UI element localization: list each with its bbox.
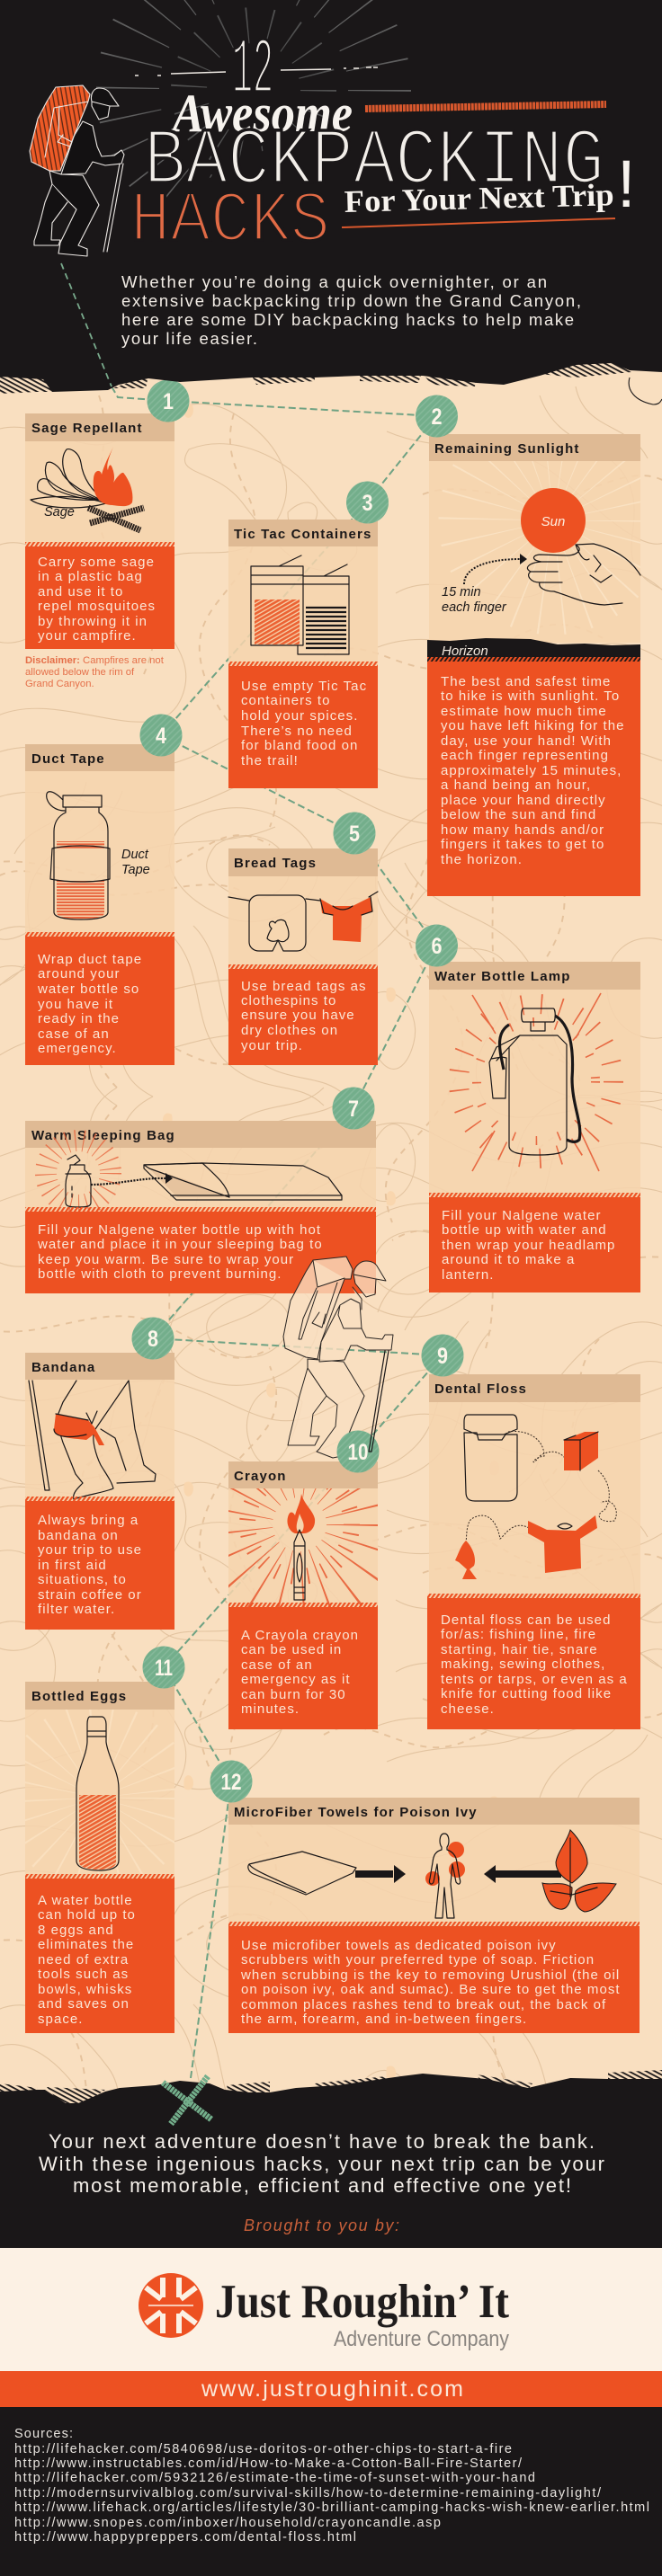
- body panel: a hand being an hour,: [441, 777, 591, 793]
- disclaimer: [25, 655, 165, 689]
- panel: MicroFiber Towels for Poison Ivy: [228, 1798, 640, 2033]
- body panel: you have left hiking for the: [441, 718, 625, 733]
- stop 10: [336, 1431, 380, 1472]
- body panel: water bottle so: [37, 982, 139, 997]
- body panel: Carry some sage: [38, 555, 155, 570]
- body panel: [25, 1497, 174, 1630]
- word BACKPACKING: BACKPACKING: [144, 118, 604, 207]
- body panel: below the sun and find: [441, 807, 596, 822]
- body panel: [427, 1594, 640, 1729]
- disclaimer: Disclaimer: Campfires are not: [25, 655, 165, 666]
- body panel: then wrap your headlamp: [442, 1238, 615, 1253]
- body panel: scrubbers with your preferred type of soap. Friction: [241, 1952, 595, 1968]
- header: dark torn-paper background: [0, 0, 662, 394]
- body panel: The best and safest time: [441, 674, 611, 689]
- stop 2: 2: [432, 404, 443, 430]
- body panel: the trail!: [241, 753, 299, 768]
- stop 7: 7: [348, 1097, 359, 1122]
- stop 6: 6: [432, 934, 443, 959]
- intro text: Whether you’re doing a quick overnighter, or an: [121, 272, 547, 291]
- icon: sun above hand: each finger: [442, 600, 507, 615]
- body panel: Fill your Nalgene water: [442, 1208, 602, 1223]
- body panel: the horizon.: [441, 852, 523, 867]
- body panel: bottle up with water and: [442, 1222, 607, 1238]
- body panel: bowls, whisks: [38, 1982, 132, 1997]
- icon: two tic tac containers: [251, 555, 349, 654]
- closing statement: most memorable, efficient and effective one yet!: [73, 2174, 571, 2197]
- stop 10: 10: [347, 1440, 369, 1465]
- body panel: starting, hair tie, snare: [441, 1642, 598, 1657]
- stop 8: 8: [148, 1327, 158, 1352]
- heading: Bandana: Bandana: [31, 1360, 95, 1375]
- panel: Sage Repellant: [25, 413, 174, 689]
- icon: towel, person, poison ivy: [248, 1830, 616, 1918]
- heading: MicroFiber Towels: MicroFiber Towels for Poison Ivy: [234, 1805, 478, 1820]
- intro text: your life easier.: [121, 329, 257, 348]
- heading: Dental Floss: Dental Floss: [434, 1381, 527, 1397]
- intro text: here are some DIY backpacking hacks to help make: [121, 310, 574, 329]
- stop 9: [421, 1334, 464, 1377]
- sources: http://www.lifehack.org/articles/lifestyle/30-brilliant-camping-hacks-wish-knew-earlier.html: [14, 2500, 649, 2515]
- body panel: [25, 932, 174, 1065]
- sources: [14, 2427, 649, 2545]
- body panel: repel mosquitoes: [38, 599, 156, 614]
- scribble underline: [365, 104, 606, 109]
- footer: dark torn-paper band: [0, 2070, 662, 2576]
- title rays: [128, 0, 380, 216]
- body panel: knife for cutting food like: [441, 1686, 612, 1701]
- sources: http://www.instructables.com/id/How-to-Make-a-Cotton-Ball-Fire-Starter/: [14, 2456, 523, 2471]
- disclaimer: allowed below the rim of: [25, 667, 135, 678]
- stop 6: [416, 924, 458, 967]
- body panel: [228, 964, 378, 1065]
- intro text: [121, 272, 581, 348]
- stop 5: [333, 813, 376, 854]
- horizon band: [427, 638, 640, 662]
- body panel: ensure you have: [241, 1008, 355, 1023]
- icon: hiker with orange pack: [30, 85, 124, 256]
- body panel: need of extra: [38, 1952, 129, 1968]
- heading: Water Bottle Lamp: Water Bottle Lamp: [434, 969, 571, 984]
- title: [130, 27, 636, 262]
- stop 4: 4: [156, 724, 166, 749]
- heading: Warm Sleeping Bag: Warm Sleeping Bag: [31, 1128, 175, 1143]
- body panel: day, use your hand! With: [441, 733, 612, 749]
- icon: sun above hand: [442, 449, 640, 615]
- stop 1: 1: [163, 389, 174, 414]
- body panel: minutes.: [241, 1701, 300, 1717]
- website band: www.justroughinit.com: [201, 2376, 463, 2402]
- logo band: [0, 2248, 662, 2371]
- intro text: extensive backpacking trip down the Grand Canyon,: [121, 291, 581, 310]
- trail end: green X: [163, 2076, 211, 2124]
- body panel: approximately 15 minutes,: [441, 763, 622, 778]
- body panel: clothespins to: [241, 993, 336, 1008]
- body panel: [429, 1193, 640, 1292]
- body panel: how many hands and/or: [441, 822, 604, 838]
- disclaimer: Grand Canyon.: [25, 679, 94, 689]
- body panel: you have it: [38, 997, 113, 1012]
- heading: Sage Repellant: Sage Repellant: [31, 421, 143, 436]
- number 12: [135, 27, 378, 116]
- panel: Bottled Eggs: [25, 1682, 174, 2033]
- icon: sage leaves, flame and crossed sticks: [31, 447, 144, 530]
- body panel: estimate how much time: [441, 704, 607, 719]
- heading: Tic Tac Containers: Tic Tac Containers: [234, 527, 372, 542]
- body panel: your trip.: [241, 1038, 303, 1053]
- website band: [0, 2371, 662, 2407]
- icon: water bottle with headlamp and rays: [459, 993, 613, 1171]
- body panel: [228, 662, 378, 788]
- sources: http://modernsurvivalblog.com/survival-skills/how-to-determine-remaining-daylight/: [14, 2486, 602, 2500]
- body panel: around it to make a: [442, 1252, 575, 1267]
- stop 2: [416, 395, 458, 437]
- heading: Crayon: Crayon: [234, 1469, 287, 1484]
- heading: Duct Tape: Duct Tape: [31, 751, 105, 767]
- body panel: for bland food on: [241, 738, 358, 753]
- body panel: can hold up to: [38, 1907, 136, 1923]
- stop 1: [148, 379, 189, 422]
- body panel: place your hand directly: [441, 793, 606, 808]
- body panel: [25, 542, 174, 649]
- icon: burning crayon with rays: [235, 1460, 364, 1600]
- trail route: dashed line connecting numbered stops: [112, 386, 443, 2078]
- body panel: emergency as it: [241, 1672, 351, 1687]
- stop 9: 9: [437, 1344, 448, 1369]
- body panel: A water bottle: [38, 1893, 133, 1908]
- body panel: [228, 1922, 640, 2033]
- body panel: containers to: [241, 693, 331, 708]
- body panel: making, sewing clothes,: [441, 1657, 605, 1672]
- body panel: situations, to: [38, 1572, 127, 1587]
- background: topographic map: [0, 360, 662, 2184]
- body panel: Fill your Nalgene water bottle up with hot: [38, 1222, 321, 1238]
- sources: Sources:: [14, 2427, 73, 2441]
- body panel: strain coffee or: [38, 1587, 142, 1603]
- body panel: 8 eggs and: [38, 1923, 114, 1938]
- body panel: dry clothes on: [241, 1023, 338, 1038]
- icon: sun above hand: Sun: [541, 514, 565, 529]
- stop 12: [210, 1760, 252, 1803]
- panel: Dental Floss: [427, 1374, 640, 1729]
- body panel: ready in the: [38, 1011, 120, 1026]
- panel: Duct Tape: [25, 744, 174, 1065]
- panel: Remaining Sunlight: [427, 434, 640, 896]
- body panel: water and place it in your sleeping bag to: [37, 1237, 323, 1252]
- body panel: tents or tarps, or even as a: [441, 1672, 628, 1687]
- heading: Bread Tags: Bread Tags: [234, 856, 317, 871]
- body panel: Use microfiber towels as dedicated poison ivy: [241, 1938, 557, 1953]
- body panel: space.: [38, 2012, 83, 2027]
- panel: Crayon: [228, 1460, 378, 1729]
- body panel: There’s no need: [241, 724, 353, 739]
- stop 11: 11: [155, 1656, 173, 1681]
- sources: http://lifehacker.com/5840698/use-doritos-or-other-chips-to-start-a-fire: [14, 2442, 512, 2456]
- icon: bottle wrapped in duct tape: Duct: [121, 848, 149, 862]
- body panel: common places rashes tend to break out, the back of: [241, 1997, 606, 2012]
- body panel: hold your spices.: [241, 708, 358, 724]
- stop 4: [140, 714, 182, 757]
- icon: egg-filled bottle: [43, 1717, 151, 1870]
- body panel: cheese.: [441, 1701, 495, 1717]
- body panel: by throwing it in: [38, 614, 148, 629]
- exclamation: !: [617, 147, 636, 221]
- central hiker trekking pole: [369, 1351, 389, 1452]
- body panel: when scrubbing is the key to removing Urushiol (the oil: [240, 1968, 620, 1983]
- icon: floss uses: [455, 1415, 616, 1579]
- stop 11: [142, 1647, 185, 1688]
- body panel: case of an: [38, 1026, 110, 1042]
- body panel: lantern.: [442, 1267, 494, 1283]
- body panel: to hike is with sunlight. To: [441, 688, 620, 704]
- stop 8: [131, 1318, 174, 1359]
- heading: Bottled Eggs: Bottled Eggs: [31, 1689, 127, 1704]
- closing statement: [39, 2130, 604, 2197]
- body panel: and saves on: [38, 1996, 130, 2012]
- body panel: Use empty Tic Tac: [241, 679, 367, 694]
- icon: bottle wrapped in duct tape: Tape: [121, 863, 150, 877]
- icon: sage leaves, flame and crossed sticks: Sage: [44, 505, 75, 520]
- stop 3: 3: [362, 491, 372, 516]
- body panel: [25, 1874, 174, 2033]
- logo icon: [139, 2273, 203, 2338]
- body panel: Dental floss can be used: [441, 1612, 611, 1628]
- body panel: Wrap duct tape: [38, 952, 142, 967]
- icon: bottle wrapped in duct tape: [47, 792, 150, 919]
- body panel: bandana on: [38, 1528, 119, 1543]
- body panel: in a plastic bag: [38, 569, 143, 584]
- body panel: fingers it takes to get to: [441, 837, 604, 852]
- orange underline: [342, 218, 615, 227]
- company name: Just Roughin’ It: [215, 2276, 509, 2328]
- body panel: around your: [38, 966, 121, 982]
- stop 5: 5: [349, 822, 360, 847]
- panel: Bandana: [25, 1353, 174, 1630]
- stop 7: [333, 1088, 374, 1129]
- body panel: your trip to use: [38, 1542, 142, 1558]
- icon: bread tags and shirt on clothesline: [228, 892, 378, 951]
- body panel: bottle with cloth to prevent burning.: [38, 1266, 282, 1282]
- panel: Bread Tags: [228, 848, 378, 1065]
- body panel: eliminates the: [38, 1937, 134, 1952]
- numbered stops: [131, 379, 464, 1803]
- word Awesome: Awesome: [170, 84, 353, 143]
- body panel: [25, 1207, 376, 1293]
- body panel: your campfire.: [38, 628, 137, 644]
- panel: Tic Tac Containers: [228, 520, 378, 788]
- company tagline: Adventure Company: [334, 2327, 509, 2351]
- trail start from hiker: [61, 263, 112, 386]
- body panel: emergency.: [38, 1041, 117, 1056]
- icon: sun above hand: 15 min: [442, 585, 481, 600]
- body panel: in first aid: [38, 1558, 107, 1573]
- body panel: the arm, forearm, and in-between fingers.: [241, 2012, 527, 2027]
- sources: http://www.happypreppers.com/dental-floss.html: [14, 2530, 356, 2545]
- body panel: A Crayola crayon: [241, 1628, 359, 1643]
- icon: hot bottle and sleeping bag: [46, 1141, 342, 1207]
- body panel: can be used in: [241, 1642, 342, 1657]
- stop 12: 12: [221, 1770, 241, 1795]
- body panel: on poison ivy, oak and sumac). Be sure to get the most: [241, 1982, 621, 1997]
- illustration: central hiker outline: [283, 1257, 393, 1458]
- horizon band: Horizon: [442, 644, 488, 659]
- body panel: Always bring a: [38, 1513, 139, 1528]
- body panel: for/as: fishing line, fire: [441, 1627, 596, 1642]
- body panel: each finger representing: [441, 748, 609, 763]
- number 12: 12: [232, 27, 273, 116]
- sources: http://www.snopes.com/inboxer/household/crayoncandle.asp: [14, 2516, 441, 2530]
- tagline: For Your Next Trip: [344, 177, 614, 219]
- body panel: tools such as: [38, 1967, 129, 1982]
- body panel: can burn for 30: [241, 1687, 346, 1702]
- brought to you by: Brought to you by:: [244, 2216, 399, 2234]
- sources: http://lifehacker.com/5932126/estimate-the-time-of-sunset-with-your-hand: [14, 2471, 535, 2485]
- panel: Warm Sleeping Bag: [25, 1121, 376, 1293]
- body panel: Use bread tags as: [241, 979, 367, 994]
- closing statement: Your next adventure doesn’t have to break the bank.: [49, 2130, 595, 2153]
- stop 3: [346, 482, 389, 523]
- icon: bandana tied on a leg: [29, 1381, 156, 1499]
- body panel: [427, 657, 640, 896]
- body panel: case of an: [241, 1657, 313, 1673]
- heading: Remaining Sunlight: Remaining Sunlight: [434, 441, 580, 457]
- word HACKS: HACKS: [130, 181, 330, 262]
- body panel: [228, 1603, 378, 1729]
- body panel: and use it to: [38, 584, 123, 600]
- closing statement: With these ingenious hacks, your next trip can be your: [39, 2153, 604, 2175]
- body panel: keep you warm. Be sure to wrap your: [38, 1252, 294, 1267]
- panel: Water Bottle Lamp: [429, 962, 640, 1292]
- body panel: filter water.: [38, 1602, 115, 1617]
